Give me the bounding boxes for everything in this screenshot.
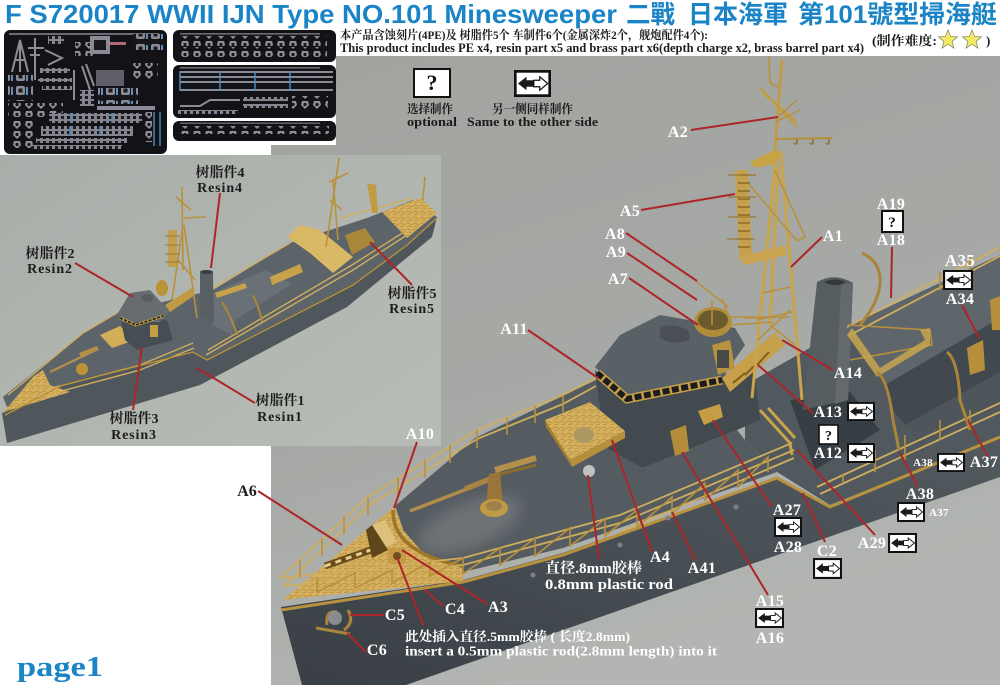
C2 — [803, 493, 841, 578]
forward deck — [395, 378, 777, 572]
A12 — [814, 444, 874, 462]
inset aft platform — [287, 225, 353, 273]
inset aft guns — [345, 228, 375, 255]
rod note 0.8mm — [545, 475, 673, 593]
legend: same to other side — [467, 71, 598, 129]
rod note 0.8mm: 0.8mm plastic rod — [545, 577, 673, 593]
resin 5 — [370, 242, 436, 317]
A15 / A16: A16 — [756, 630, 784, 647]
callouts: midship — [612, 365, 998, 647]
A35 / A34 — [944, 251, 979, 338]
A14: A14 — [834, 365, 862, 382]
A19 / A18: A19 — [877, 196, 905, 213]
aft rails — [817, 247, 1000, 494]
A19 / A18: ? — [888, 215, 896, 231]
inset bow brass — [3, 370, 70, 413]
resin 3 — [110, 347, 158, 443]
page number: page1 — [17, 652, 103, 683]
A1 — [791, 228, 843, 267]
main photo: ship close-up — [280, 57, 1000, 685]
rear deckhouse — [847, 256, 1000, 445]
rear deck — [745, 255, 1000, 505]
crane arms — [860, 253, 1000, 450]
resin 3: Resin3 — [111, 428, 157, 443]
photo-etch sheet: middle railing strip — [173, 65, 336, 118]
legend en: optional — [407, 114, 457, 129]
hull strake — [281, 437, 1000, 610]
anchor fittings — [316, 610, 351, 634]
A38 / A37 side: A37 — [970, 454, 998, 471]
callouts: bow — [237, 426, 718, 659]
C6: C6 — [367, 642, 387, 659]
inset brass balcony — [100, 326, 135, 348]
starboard rails — [282, 443, 794, 592]
A41 — [672, 512, 716, 577]
inset labels — [26, 164, 436, 443]
optional box: ? — [825, 429, 832, 444]
A7 — [608, 271, 698, 325]
A41: A41 — [688, 560, 716, 577]
A35 / A34: A35 — [945, 251, 975, 270]
A27 / A28 — [713, 420, 802, 556]
icon: question box: ? — [426, 70, 438, 95]
A5: A5 — [620, 203, 640, 220]
inset brass rails — [5, 198, 437, 415]
A4 — [612, 440, 670, 566]
brass balcony platform — [545, 402, 625, 477]
C5 — [350, 607, 405, 624]
C4 — [425, 590, 465, 618]
icon: double arrow — [515, 71, 550, 96]
rod note 0.8mm: 直径.8mm胶棒 — [545, 559, 643, 577]
A38 / A37 lower — [898, 453, 949, 521]
A1: A1 — [823, 228, 843, 245]
legend cn: 选择制作 — [407, 101, 453, 116]
inset midship deckhouse — [212, 270, 292, 335]
icon: star — [962, 30, 982, 48]
A10: A10 — [406, 426, 434, 443]
A3: A3 — [488, 599, 508, 616]
A19 / A18: A18 — [877, 232, 905, 249]
mast tripod — [727, 57, 832, 400]
description chinese: 本产品含蚀刻片(4PE)及 树脂件5个 车制件6个(金属深炸2个，舰炮配件4个): — [340, 27, 708, 42]
product description — [340, 27, 864, 55]
main photo background — [271, 56, 1000, 685]
difficulty label: (制作难度: — [872, 33, 937, 48]
icon: star — [938, 30, 958, 48]
resin 4: 树脂件4 — [196, 164, 244, 181]
inset stern brass — [382, 198, 437, 238]
resin 2 — [26, 245, 133, 297]
description english: This product includes PE x4, resin part x5 and brass part x6(depth charge x2, brass barrel part x4) — [340, 41, 864, 55]
port rails — [280, 378, 596, 586]
funnel — [790, 277, 880, 470]
photo-etch sheet: bottom strip — [173, 121, 336, 141]
A5 — [620, 194, 735, 220]
resin 4 — [196, 164, 244, 268]
inset bridge — [118, 280, 173, 350]
hull side — [281, 437, 1000, 685]
resin 3: 树脂件3 — [110, 410, 158, 427]
A12: A12 — [814, 445, 842, 462]
legend en: Same to the other side — [467, 114, 598, 129]
A8 — [605, 226, 697, 281]
hull portholes — [533, 507, 736, 575]
resin 5: 树脂件5 — [388, 285, 436, 302]
resin 5: Resin5 — [389, 302, 435, 317]
callouts: mast and bridge — [500, 117, 979, 382]
resin 2: Resin2 — [27, 262, 73, 277]
A38 / A37 side — [913, 420, 998, 471]
A4: A4 — [650, 549, 670, 566]
legend cn: 另一侧同样制作 — [492, 101, 573, 116]
resin 2: 树脂件2 — [26, 245, 74, 262]
resin 1 — [197, 368, 304, 425]
A19 / A18 — [877, 196, 905, 298]
bridge body — [595, 360, 760, 468]
legend: optional — [407, 69, 457, 129]
resin 1: Resin1 — [257, 410, 303, 425]
A2: A2 — [668, 124, 688, 141]
C4: C4 — [445, 601, 465, 618]
A13 — [758, 365, 874, 421]
difficulty rating — [872, 30, 990, 48]
A27 / A28: A27 — [773, 502, 801, 519]
A11 — [500, 321, 598, 378]
A8: A8 — [605, 226, 625, 243]
inset gun — [50, 348, 98, 375]
bow foredeck brass — [283, 506, 463, 600]
A9 — [606, 244, 697, 300]
bridge roof — [595, 315, 745, 398]
A15 / A16: A15 — [756, 593, 784, 610]
inset hull — [2, 217, 437, 443]
A15 / A16 — [682, 452, 784, 647]
rod note 0.5mm: insert a 0.5mm plastic rod(2.8mm length) into it — [405, 644, 718, 658]
breakwater — [393, 510, 462, 566]
A2 — [668, 117, 778, 141]
A35 / A34: A34 — [946, 291, 974, 308]
photo-etch sheet: large fret — [4, 30, 167, 154]
A29: A29 — [858, 535, 886, 552]
inset mid fittings — [215, 264, 303, 335]
bridge windows — [597, 373, 722, 399]
title — [5, 0, 997, 31]
A13: A13 — [814, 404, 842, 421]
closing bracket: ) — [986, 33, 990, 48]
optional box — [819, 425, 838, 444]
gun director tub — [694, 282, 773, 337]
A38 / A37 lower: A38 — [906, 486, 934, 503]
inset funnel — [200, 270, 214, 323]
A9: A9 — [606, 244, 626, 261]
deck gun — [410, 458, 536, 517]
A29 — [797, 450, 916, 552]
resin 4: Resin4 — [197, 181, 243, 196]
anchor chain and hawse — [325, 520, 406, 566]
photo-etch sheet: top strip — [173, 30, 336, 62]
C5: C5 — [385, 607, 405, 624]
A7: A7 — [608, 271, 628, 288]
title cjk: type: 第101號型掃海艇 — [798, 1, 997, 29]
A38 / A37 lower: A37 — [929, 507, 949, 519]
ladder and small fittings — [670, 332, 795, 456]
A14 — [782, 340, 862, 382]
inset fore mast — [165, 187, 206, 318]
A11: A11 — [500, 321, 528, 338]
C2: C2 — [817, 543, 837, 560]
A27 / A28: A28 — [774, 539, 802, 556]
C6 — [347, 633, 387, 659]
A38 / A37 side: A38 — [913, 457, 933, 469]
rod note 0.5mm: 此处插入直径.5mm胶棒 ( 长度2.8mm) — [405, 629, 630, 644]
A3 — [402, 550, 508, 616]
A6: A6 — [237, 483, 257, 500]
rod note 0.5mm — [397, 557, 718, 658]
resin 1: 树脂件1 — [256, 392, 304, 409]
inset panel: full ship view — [0, 155, 441, 446]
inset background — [0, 155, 441, 446]
inset aft masts — [326, 158, 425, 247]
A6 — [237, 483, 342, 545]
inset decks — [3, 200, 437, 407]
A10 — [394, 426, 434, 508]
